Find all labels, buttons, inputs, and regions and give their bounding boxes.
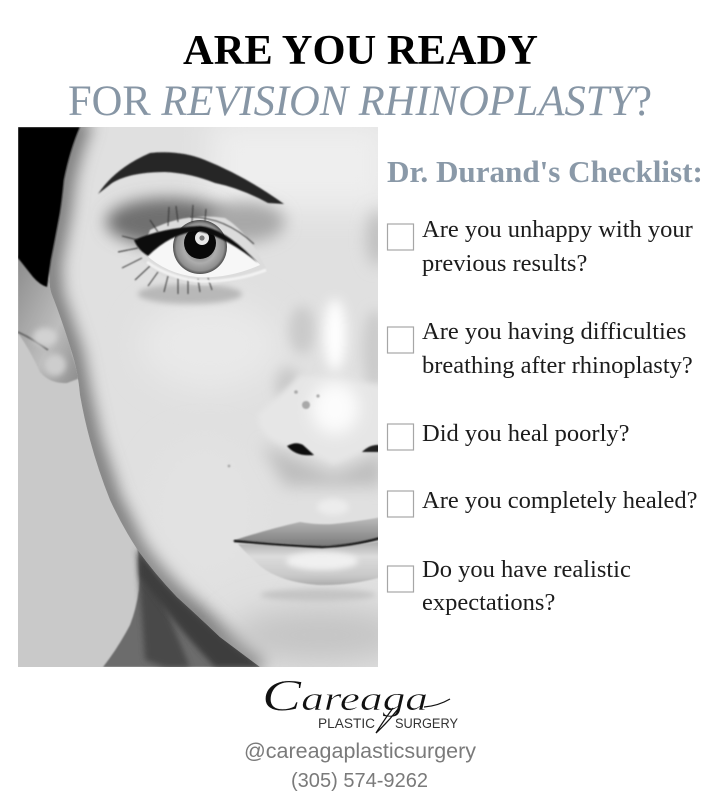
nose side shading [275, 306, 315, 403]
freckles [228, 390, 320, 467]
checklist item 5: Do you have realistic [422, 556, 631, 583]
ear [18, 255, 80, 383]
title [68, 28, 652, 125]
hair [18, 127, 80, 287]
neck [103, 545, 270, 667]
checklist item 2: breathing after rhinoplasty? [422, 352, 693, 379]
checklist heading: Dr. Durand's Checklist: [387, 154, 703, 189]
phone number: (305) 574-9262 [291, 770, 428, 792]
logo [262, 671, 458, 733]
checkbox 4 [388, 491, 414, 517]
face skin [49, 127, 378, 667]
checklist item 1 [388, 216, 693, 277]
portrait photo [18, 120, 410, 667]
title line 1: ARE YOU READY [183, 28, 538, 74]
logo subtitle left: PLASTIC [318, 716, 375, 731]
logo subtitle right: SURGERY [395, 716, 458, 731]
face shading [213, 127, 378, 207]
logo flourish [376, 699, 450, 733]
checkbox 2 [388, 327, 414, 353]
checklist item 1: Are you unhappy with your [422, 216, 693, 243]
nose bridge highlight [324, 299, 346, 371]
eyelashes and lid line [134, 226, 258, 263]
checklist item 3: Did you heal poorly? [422, 420, 630, 447]
nose underside [262, 445, 382, 486]
checklist item 5 [388, 556, 631, 616]
checklist item 2: Are you having difficulties [422, 318, 686, 345]
nostrils [287, 443, 314, 455]
checkbox 5 [388, 566, 414, 592]
checkbox 3 [388, 424, 414, 450]
logo script wordmark: C areaga [262, 671, 428, 720]
eyebrow [98, 152, 284, 204]
social handle: @careagaplasticsurgery [244, 740, 477, 763]
lips [232, 517, 382, 546]
eye [148, 216, 252, 286]
checklist item 5: expectations? [422, 589, 555, 616]
title line 2: FOR REVISION RHINOPLASTY? [68, 78, 652, 125]
checklist item 1: previous results? [422, 250, 587, 277]
checkbox 1 [388, 224, 414, 250]
eye shadow [106, 198, 230, 246]
checklist item 2 [388, 318, 693, 379]
checklist item 4: Are you completely healed? [422, 487, 698, 514]
